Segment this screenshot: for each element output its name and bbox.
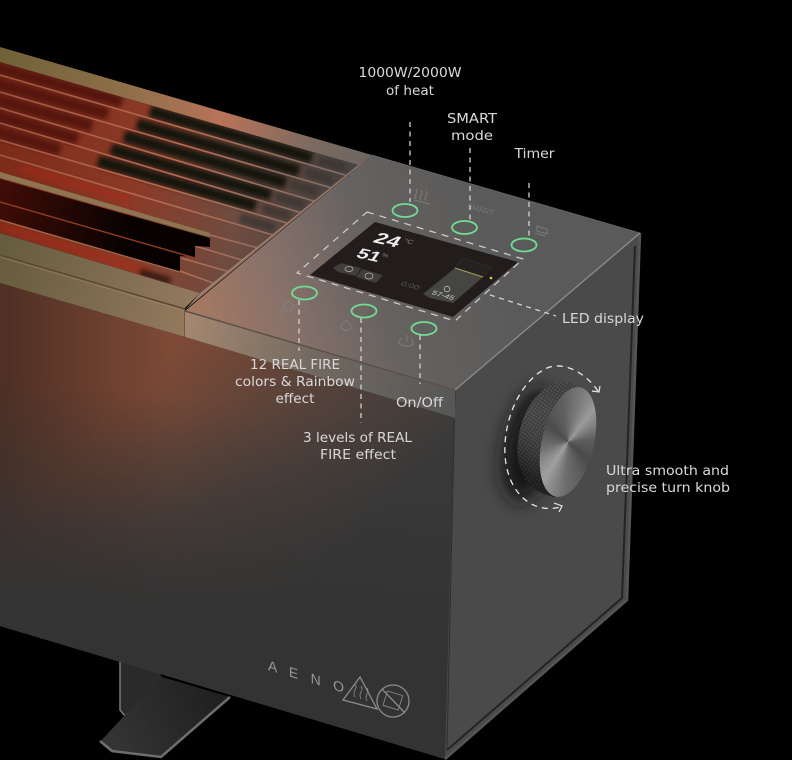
- temperature readout: 24: [370, 230, 406, 251]
- rotation arrow: [505, 366, 600, 512]
- icon: power: [399, 335, 413, 346]
- slider: 57-45: [430, 289, 457, 302]
- button: on off: [412, 322, 436, 335]
- label: knob: Ultra smooth and: [606, 464, 729, 479]
- knob shadow: [492, 383, 568, 507]
- callouts: effect: [276, 392, 314, 407]
- front face: [0, 283, 455, 759]
- brand logo: A E N O: [268, 658, 344, 697]
- label: on off: On/Off: [396, 396, 444, 411]
- label: smart mode: SMART: [447, 112, 498, 127]
- vent with fire glow: [0, 62, 358, 293]
- function icons: [280, 189, 547, 346]
- callouts: precise turn knob: [606, 481, 730, 496]
- icon: drop: [341, 320, 351, 330]
- mode pills: [333, 263, 383, 283]
- knob face: [510, 380, 626, 504]
- callouts: colors & Rainbow: [235, 375, 355, 390]
- icon: bulb: [280, 301, 297, 311]
- right side face: [445, 233, 640, 759]
- callouts: mode: [451, 129, 493, 144]
- LED screen: °C: [402, 237, 416, 246]
- smart label: SMART: [467, 201, 495, 218]
- display dashed frame: [297, 212, 523, 321]
- humidity readout: 51: [353, 245, 386, 265]
- callouts: [235, 66, 730, 496]
- knob: [492, 366, 626, 512]
- LED screen: %: [380, 252, 390, 259]
- black slots: [0, 172, 210, 237]
- front lip strip: [0, 233, 200, 337]
- button: timer: [512, 238, 536, 252]
- stand: [100, 660, 230, 757]
- callouts: FIRE effect: [320, 448, 396, 463]
- label: power: 1000W/2000W: [358, 66, 462, 81]
- icon: do not cover: [377, 685, 409, 717]
- status dot: [490, 277, 492, 279]
- label: fire levels: 3 levels of REAL: [303, 431, 413, 446]
- label: timer: Timer: [513, 147, 555, 162]
- knurled side: [517, 382, 580, 497]
- pill icons: [345, 266, 373, 279]
- label: fire colours: 12 REAL FIRE: [250, 358, 340, 373]
- icon: hot surface triangle: [343, 677, 377, 709]
- icon: timer: [535, 226, 547, 236]
- LED screen: [310, 222, 518, 317]
- button: fire colour: [292, 286, 317, 300]
- icon: heat waves: [414, 189, 430, 204]
- top strip above vent: [0, 47, 372, 165]
- control panel top: [185, 155, 640, 418]
- leader lines: [299, 122, 556, 423]
- touch buttons: [292, 204, 536, 335]
- button: smart: [452, 221, 477, 234]
- callouts: of heat: [386, 84, 434, 99]
- button: fire level: [352, 304, 376, 318]
- label: LED display: LED display: [562, 312, 644, 327]
- button: power level: [392, 204, 418, 217]
- heater body: [0, 47, 640, 759]
- slider: [423, 258, 492, 303]
- icon: brand and safety marks: [268, 658, 409, 717]
- timer readout: 0:00: [399, 279, 422, 292]
